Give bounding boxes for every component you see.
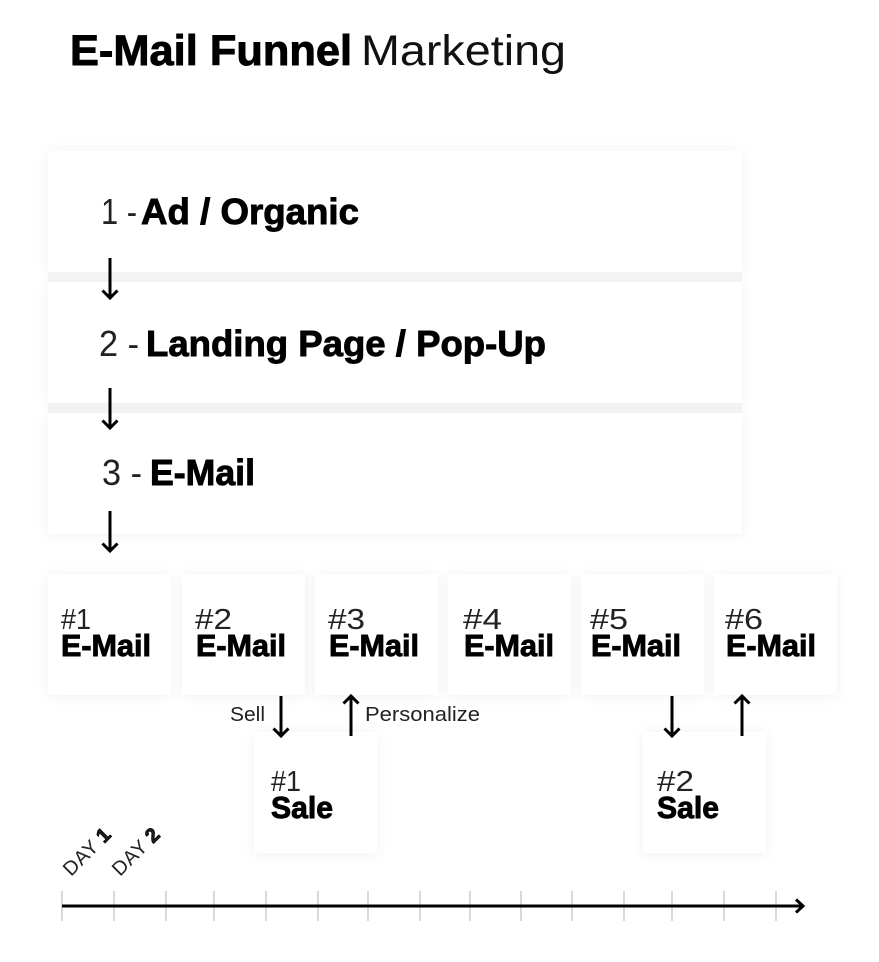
card: e-mail 3 <box>315 574 438 695</box>
label: day 2: DAY 2 <box>108 824 165 881</box>
arrow: sell <box>274 696 288 736</box>
panel: step 3 e-mail: E-Mail <box>150 452 255 493</box>
card: e-mail 4 <box>448 574 571 695</box>
card: e-mail 6 <box>714 574 837 695</box>
timeline <box>62 891 803 921</box>
card: e-mail 6: E-Mail <box>726 628 816 663</box>
arrow: step 2 to step 3 <box>102 388 118 428</box>
panel: step 1 ad / organic: 1 - <box>101 191 137 232</box>
card: e-mail 1: E-Mail <box>61 628 151 663</box>
label: day 1: DAY 1 <box>59 824 116 881</box>
card: sale 1: #1 <box>271 766 301 798</box>
card: sale 2: Sale <box>657 790 719 825</box>
title: E-Mail Funnel <box>70 27 352 75</box>
card: sale 1 <box>254 732 377 853</box>
card: sale 2: #2 <box>657 766 694 798</box>
gap band between steps 2 and 3 <box>48 403 742 413</box>
card: e-mail 1 <box>48 574 171 695</box>
card: e-mail 6: #6 <box>725 604 763 636</box>
title: Marketing <box>361 27 566 75</box>
gap band between steps 1 and 2 <box>48 272 742 282</box>
panel: step 3 e-mail <box>48 413 742 534</box>
card: e-mail 3: E-Mail <box>329 628 419 663</box>
panel: step 1 ad / organic <box>48 151 742 272</box>
panel: step 2 landing page / pop-up: 2 - <box>99 323 139 364</box>
card: e-mail 2 <box>182 574 305 695</box>
title <box>70 27 566 75</box>
arrow: sell sale 2 <box>664 696 680 736</box>
card: e-mail 5: E-Mail <box>591 628 681 663</box>
card: e-mail 2: E-Mail <box>196 628 286 663</box>
card: e-mail 4: E-Mail <box>464 628 554 663</box>
arrow: personalize sale 2 <box>734 696 750 736</box>
panel: step 2 landing page / pop-up: Landing Page / Pop-Up <box>146 323 546 364</box>
arrow: step 1 to step 2 <box>102 258 118 298</box>
panel: step 3 e-mail: 3 - <box>102 452 142 493</box>
panel: step 1 ad / organic: Ad / Organic <box>141 191 359 232</box>
label: sell: Sell <box>230 704 265 726</box>
card: e-mail 3: #3 <box>328 604 365 636</box>
card: sale 1: Sale <box>271 790 333 825</box>
card: e-mail 5 <box>581 574 704 695</box>
card: e-mail 1: #1 <box>61 604 91 636</box>
card: e-mail 2: #2 <box>195 604 232 636</box>
card: e-mail 5: #5 <box>590 604 628 636</box>
card: sale 2 <box>643 732 766 853</box>
label: personalize: Personalize <box>365 704 480 726</box>
panel: step 2 landing page / pop-up <box>48 282 742 403</box>
arrow: step 3 to e-mails <box>102 511 118 551</box>
arrow: personalize <box>344 696 358 736</box>
card: e-mail 4: #4 <box>463 604 502 636</box>
